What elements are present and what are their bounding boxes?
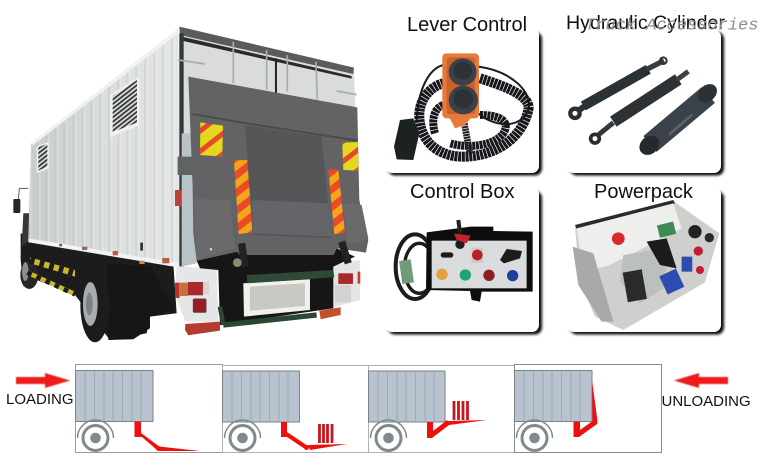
step 2 — [222, 366, 368, 452]
hydraulic cylinder heading: Hydraulic Cylinder — [566, 12, 725, 34]
watermark: Truck Accessories — [585, 16, 758, 36]
yellow reflector right — [342, 142, 358, 171]
step 1 — [76, 364, 222, 452]
control box heading: Control Box — [410, 181, 514, 203]
panel: lever control — [385, 14, 542, 176]
orange strip left — [234, 160, 252, 234]
step 3 — [368, 366, 514, 452]
hydraulic cylinder photo — [570, 57, 721, 159]
lever control heading: Lever Control — [407, 14, 527, 36]
loading label: LOADING — [6, 391, 74, 408]
panel: powerpack — [567, 181, 724, 334]
yellow reflector left — [200, 122, 223, 157]
tail lift gate — [175, 77, 368, 261]
panel: control box — [385, 181, 542, 334]
truck photo — [13, 27, 368, 342]
powerpack heading: Powerpack — [594, 181, 694, 203]
lift arms — [233, 242, 348, 267]
box side panel — [28, 28, 179, 268]
rear doors — [178, 27, 357, 267]
control box photo — [396, 220, 533, 302]
step 4 — [514, 364, 662, 452]
rear wheel — [80, 263, 175, 342]
lever control photo — [394, 53, 529, 160]
unloading label: UNLOADING — [662, 393, 751, 410]
panel: hydraulic cylinder — [566, 12, 725, 176]
rear body and bumper — [175, 133, 360, 335]
powerpack photo — [573, 200, 719, 330]
small vent — [37, 142, 49, 173]
arrow: loading — [16, 373, 70, 388]
cab and chassis — [13, 188, 177, 340]
orange strip right — [328, 169, 345, 234]
side markers — [59, 243, 169, 264]
arrow: unloading — [674, 373, 728, 388]
loading sequence diagram — [6, 364, 751, 452]
chassis hazard rails — [27, 257, 75, 297]
large vent — [110, 77, 139, 137]
